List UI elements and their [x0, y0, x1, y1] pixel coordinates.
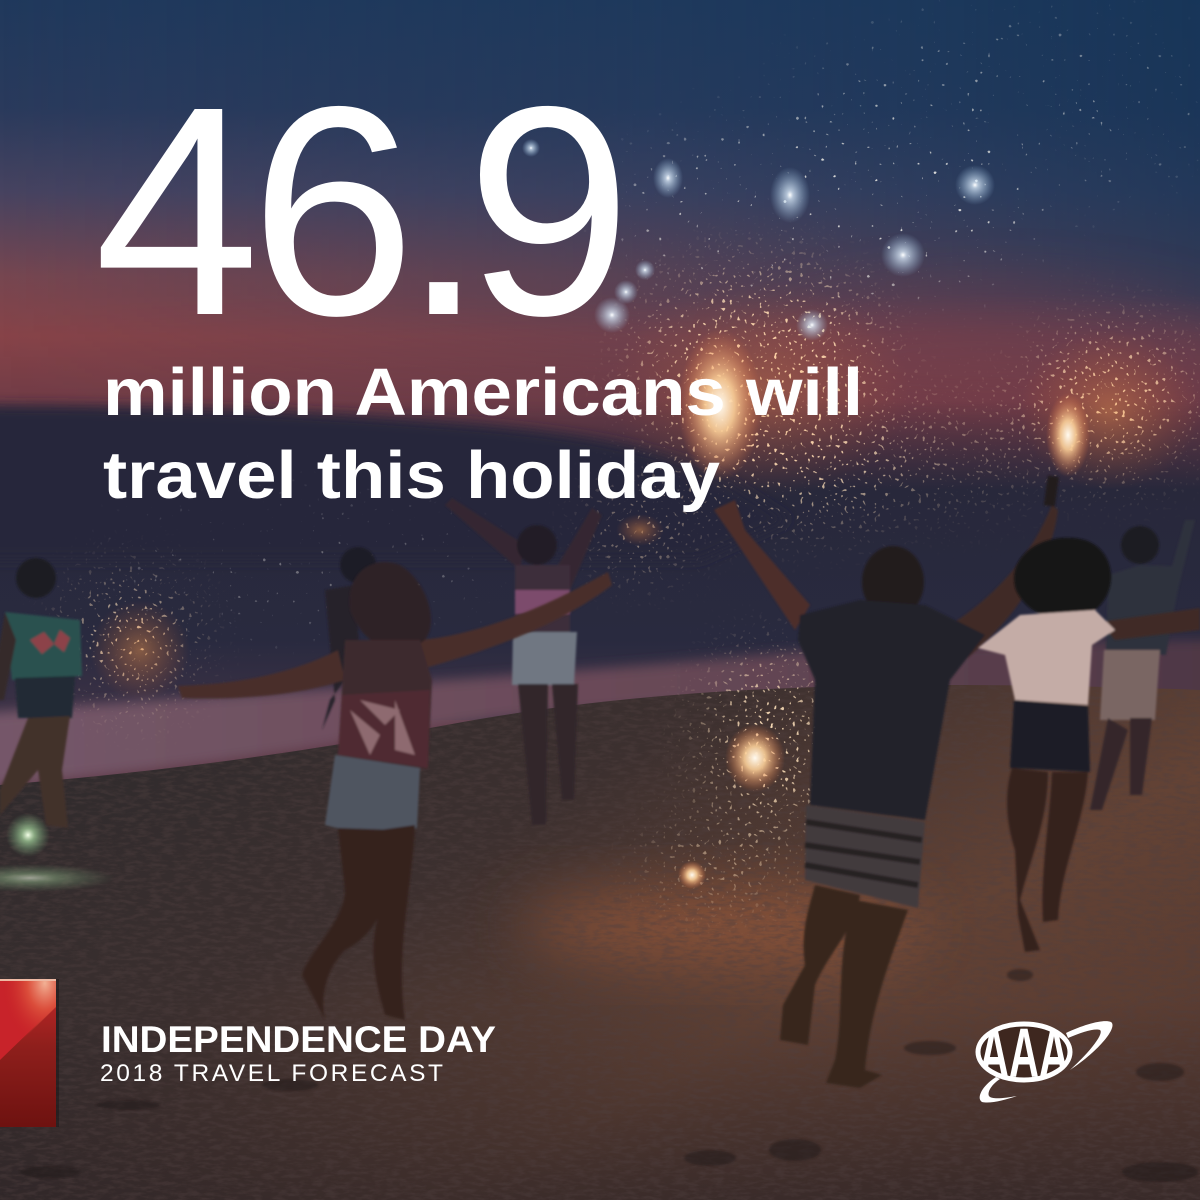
footprints in the sand [20, 969, 1198, 1182]
headline: million Americans will travel this holiday: million Americans will [103, 355, 863, 430]
person: man with flare [714, 475, 1059, 1088]
person: woman in white top [978, 538, 1200, 952]
forecast badge: red square [0, 979, 59, 1127]
icon: AAA logo: AAA [979, 1014, 1069, 1092]
person: far right man [1090, 520, 1195, 810]
person: woman in patterned top [178, 562, 612, 1020]
headline: million Americans will travel this holiday: travel this holiday [103, 438, 720, 513]
firework sparks [42, 0, 1200, 926]
firework glows [0, 139, 1200, 892]
person: left background figure [0, 558, 82, 828]
label: Independence Day 2018 Travel Forecast: INDEPENDENCE DAY [101, 1019, 496, 1060]
person: distant figure behind woman [322, 547, 376, 730]
title number: 46.9: 46.9 [94, 45, 632, 378]
label: Independence Day 2018 Travel Forecast [100, 1019, 496, 1087]
label: Independence Day 2018 Travel Forecast: 2018 TRAVEL FORECAST [100, 1060, 443, 1087]
person: back centre woman [445, 498, 602, 825]
headline: million Americans will travel this holiday [103, 355, 863, 513]
